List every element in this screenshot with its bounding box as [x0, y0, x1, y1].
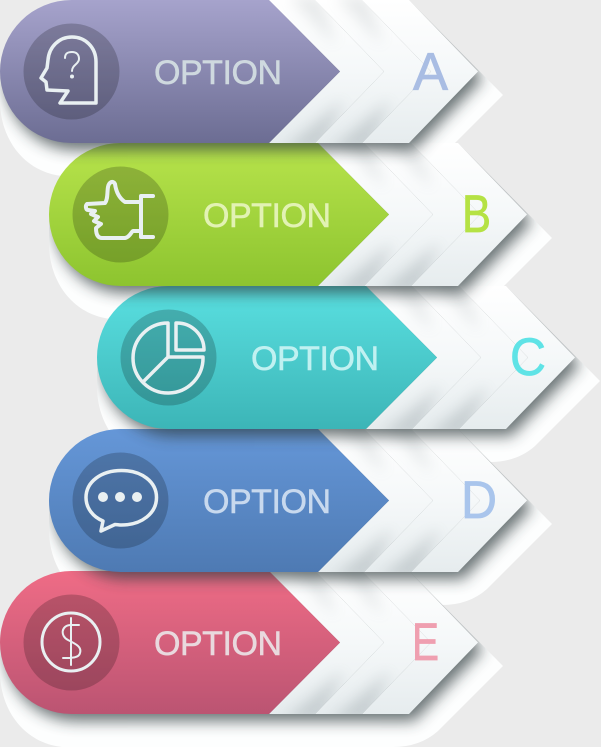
row E: [0, 567, 483, 721]
letter A: A: [413, 42, 449, 102]
icon: dollar coin: [24, 594, 120, 690]
row A: [0, 0, 483, 150]
row B: [49, 139, 532, 293]
row C: [97, 282, 580, 436]
label: OPTION: OPTION: [154, 54, 282, 92]
label: OPTION: OPTION: [203, 483, 331, 521]
letter E: E: [412, 613, 439, 672]
letter B: B: [462, 185, 491, 244]
letter C: C: [510, 328, 546, 387]
icon: speech bubble: [72, 452, 168, 548]
icon: head with question mark: [24, 24, 120, 120]
icon: thumbs up: [72, 166, 168, 262]
label: OPTION: OPTION: [154, 625, 282, 663]
row D: [49, 425, 532, 579]
label: OPTION: OPTION: [251, 340, 379, 378]
label: OPTION: OPTION: [203, 197, 331, 235]
icon: pie chart: [120, 310, 216, 406]
letter D: D: [461, 471, 497, 530]
